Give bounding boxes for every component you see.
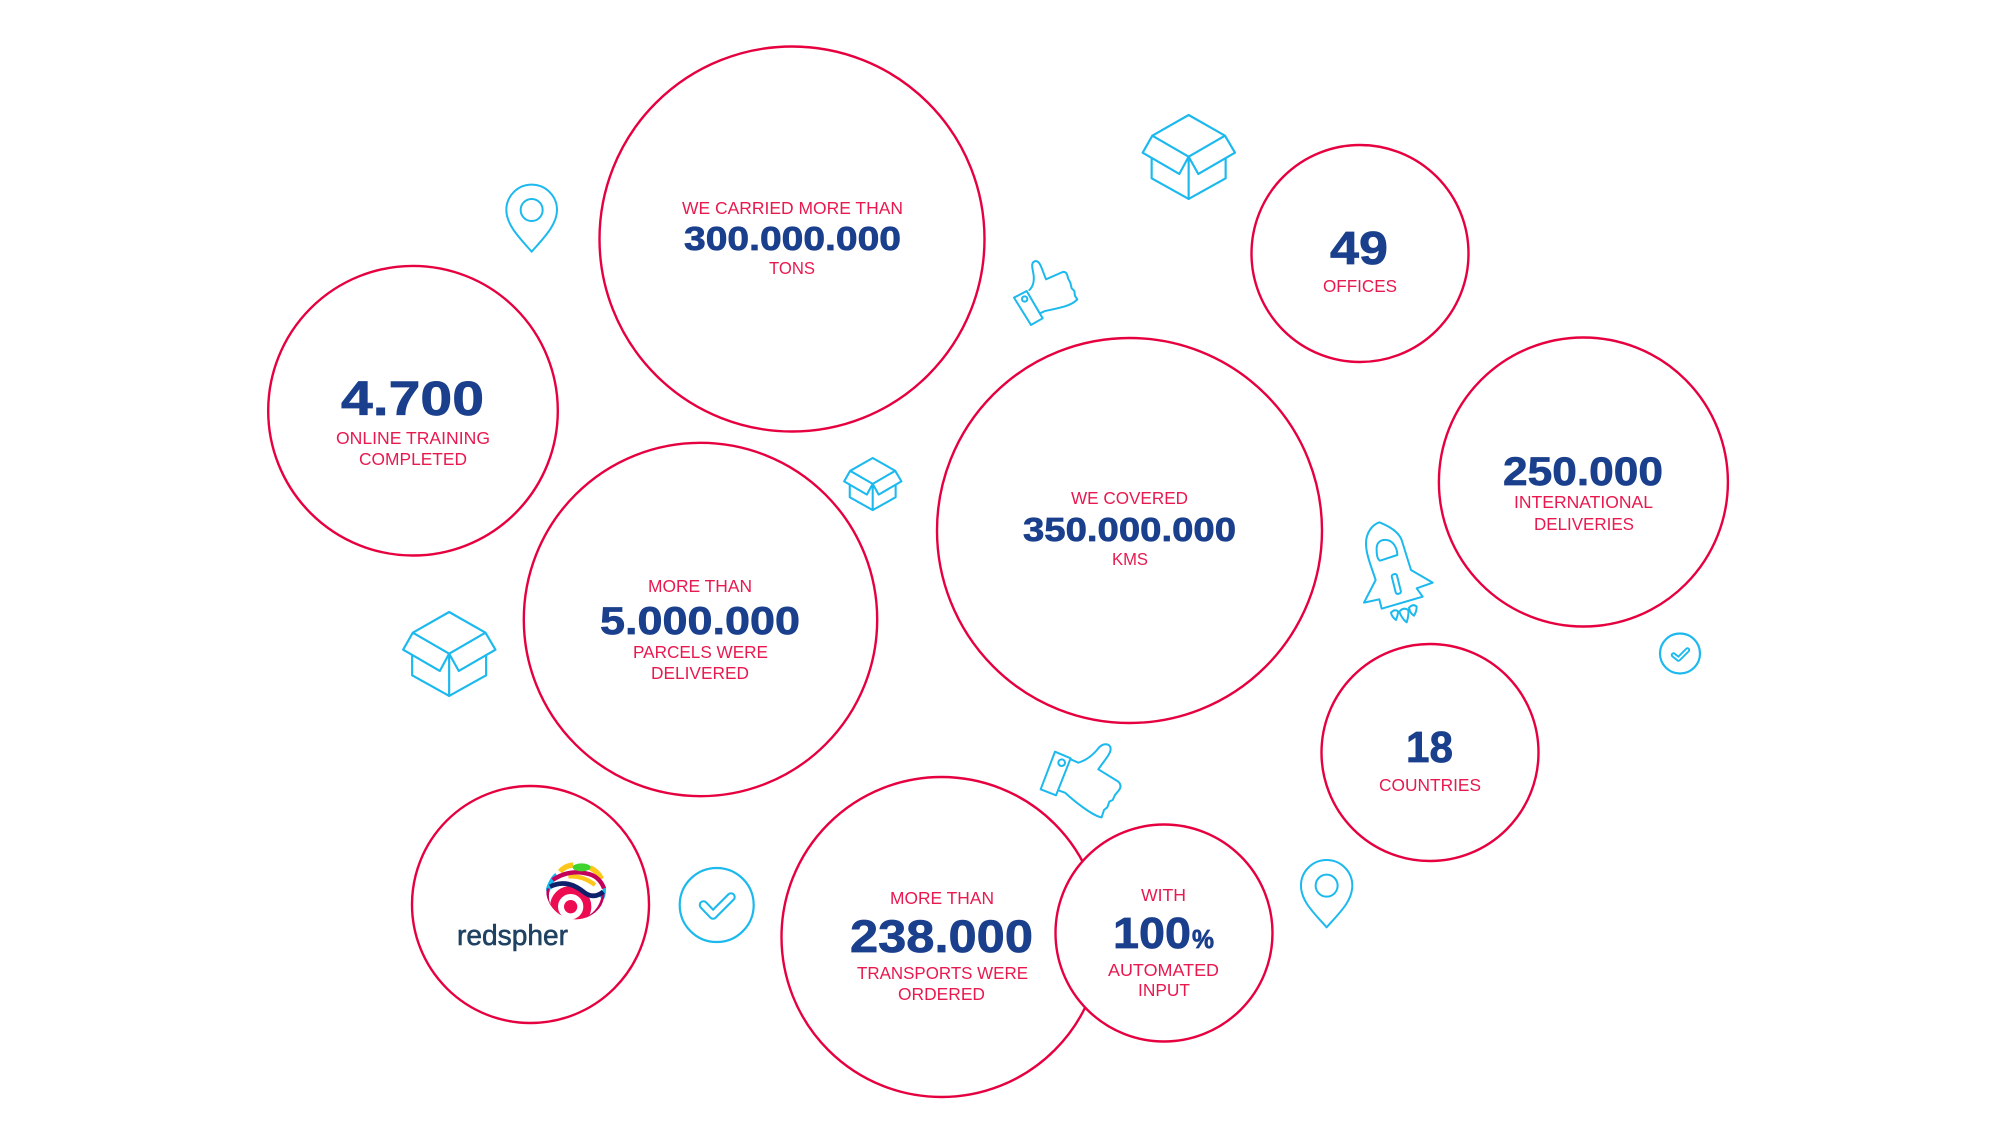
panel: 250.000 international: INTERNATIONAL xyxy=(1514,492,1653,512)
icon: small box xyxy=(844,458,901,510)
icon: thumbs up large xyxy=(1041,744,1120,817)
panel: 4.700 online training: COMPLETED xyxy=(359,449,467,469)
panel: 100% automated: WITH xyxy=(1141,885,1186,905)
panel: 238.000 transports xyxy=(782,777,1102,1097)
panel: 5.000.000 parcels: PARCELS WERE xyxy=(633,642,768,662)
panel: 238.000 transports: ORDERED xyxy=(898,984,985,1004)
panel: 5.000.000 parcels: 5.000.000 xyxy=(600,600,800,643)
panel: 100% automated xyxy=(1056,824,1272,1042)
panel: 100% automated: INPUT xyxy=(1138,980,1190,1000)
panel: 238.000 transports: MORE THAN xyxy=(890,888,994,908)
icon: rocket xyxy=(1364,522,1433,622)
panel: 5.000.000 parcels xyxy=(524,443,877,796)
panel: 300.000.000 tons: WE CARRIED MORE THAN xyxy=(682,198,903,218)
panel: 100% automated: 100 xyxy=(1113,909,1191,958)
icon: map pin top-left xyxy=(506,185,557,252)
panel: 5.000.000 parcels: DELIVERED xyxy=(651,663,749,683)
panel: 4.700 online training: 4.700 xyxy=(341,373,484,426)
icon: small check circle xyxy=(1660,634,1700,674)
panel: 350.000.000 kms: KMS xyxy=(1112,549,1148,569)
panel: redspher logo circle xyxy=(412,786,649,1023)
panel: 238.000 transports: 238.000 xyxy=(850,911,1033,962)
panel: 18 countries: 18 xyxy=(1406,723,1453,772)
panel: 350.000.000 kms: 350.000.000 xyxy=(1023,511,1236,548)
panel: 18 countries: COUNTRIES xyxy=(1379,775,1481,795)
panel: 49 offices: 49 xyxy=(1330,222,1388,274)
panel: 238.000 transports: TRANSPORTS WERE xyxy=(857,963,1028,983)
logo: striped sphere xyxy=(547,863,605,923)
icon: box top xyxy=(1143,115,1235,199)
panel: 100% automated: AUTOMATED xyxy=(1108,960,1219,980)
panel: 49 offices xyxy=(1252,145,1468,362)
panel: 100% automated: % xyxy=(1192,924,1214,954)
panel: 300.000.000 tons xyxy=(600,46,984,432)
icon: box left xyxy=(403,612,495,696)
panel: 250.000 international: DELIVERIES xyxy=(1534,514,1634,534)
panel: 250.000 international xyxy=(1439,338,1728,626)
panel: 18 countries xyxy=(1322,644,1538,861)
panel: 4.700 online training: ONLINE TRAINING xyxy=(336,428,490,448)
icon: thumbs up small xyxy=(1014,261,1077,325)
panel: 350.000.000 kms: WE COVERED xyxy=(1071,488,1188,508)
icon: large check circle xyxy=(680,868,754,942)
panel: 350.000.000 kms xyxy=(937,338,1322,723)
panel: 5.000.000 parcels: MORE THAN xyxy=(648,576,752,596)
panel: 250.000 international: 250.000 xyxy=(1503,450,1663,494)
logo: redspher wordmark: redspher xyxy=(457,920,568,952)
icon: map pin bottom-right xyxy=(1301,860,1352,927)
panel: 300.000.000 tons: 300.000.000 xyxy=(684,220,901,257)
panel: 4.700 online training xyxy=(268,266,558,556)
panel: 49 offices: OFFICES xyxy=(1323,276,1397,296)
panel: 300.000.000 tons: TONS xyxy=(769,258,815,278)
